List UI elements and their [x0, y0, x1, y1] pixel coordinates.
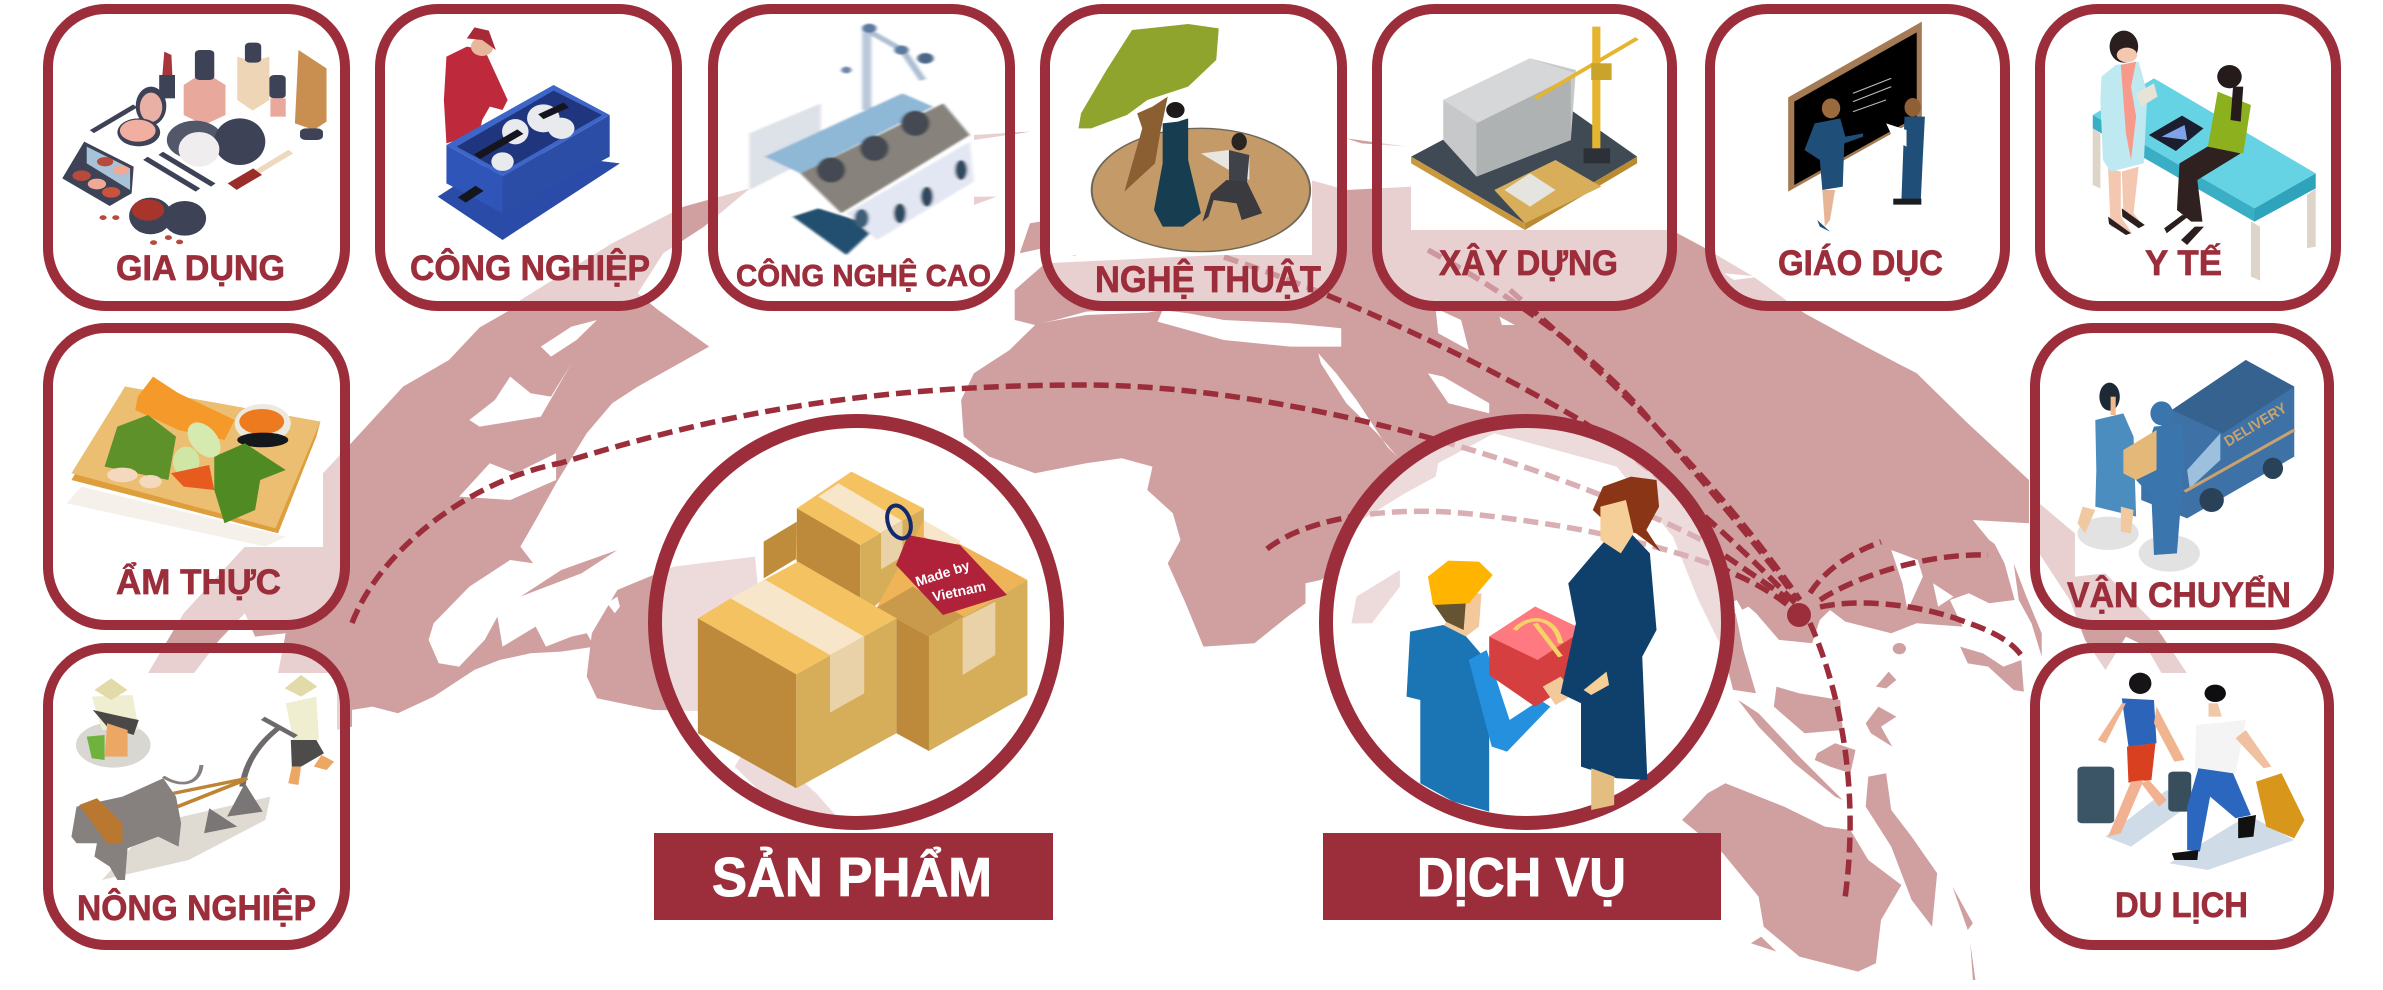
panel: Y tế [2040, 9, 2336, 306]
label: ẨM THỰC [116, 562, 281, 602]
icon: teachers at blackboard [1788, 22, 1925, 232]
label: GIÁO DỤC [1778, 243, 1943, 283]
icon: travellers with luggage [2077, 673, 2304, 870]
label: Y TẾ [2145, 243, 2222, 283]
panel: Xây dựng [1377, 9, 1672, 306]
icon: high-tech production line [749, 24, 974, 255]
icon: worker and gearbox [438, 27, 620, 240]
icon: doctor and patient [2093, 31, 2316, 281]
background world map [148, 132, 2187, 980]
panel: Công nghệ cao [713, 9, 1010, 306]
label: XÂY DỰNG [1439, 243, 1618, 283]
vietnam hub marker [1787, 603, 1811, 627]
icon: cosmetics [62, 43, 327, 245]
icon: delivery van and courier [2077, 360, 2294, 572]
panel: Giáo dục [1710, 9, 2005, 306]
panel: Nghệ thuật [1045, 9, 1342, 306]
panel: Gia dụng [48, 9, 345, 306]
icon: cardboard boxes [698, 472, 1027, 788]
icon: made by vietnam tag [883, 502, 1007, 615]
icon: made by vietnam tag: Vietnam [931, 578, 987, 605]
icon: building construction site [1411, 27, 1637, 230]
panel: Ẩm thực [48, 328, 345, 625]
banner: Dịch vụ: DỊCH VỤ [1417, 846, 1626, 908]
dashed route lines [352, 250, 2021, 898]
label: GIA DỤNG [116, 249, 285, 288]
panel: Sản phẩm circle [655, 421, 1057, 823]
banner: Dịch vụ [1323, 833, 1721, 920]
panel: Nông nghiệp [48, 648, 345, 945]
van lettering: DELIVERY [2221, 400, 2290, 450]
banner: Sản phẩm: SẢN PHẨM [712, 846, 992, 908]
label: NÔNG NGHIỆP [77, 888, 316, 928]
panel: Vận chuyển [2035, 328, 2329, 625]
label: CÔNG NGHỆ CAO [736, 257, 991, 293]
panel: Dịch vụ circle [1326, 421, 1728, 823]
icon: couple under a tree [1078, 24, 1310, 252]
label: NGHỆ THUẬT [1095, 258, 1321, 300]
label: VẬN CHUYỂN [2067, 575, 2291, 615]
label: CÔNG NGHIỆP [410, 248, 650, 288]
label: DU LỊCH [2115, 886, 2248, 925]
icon: made by vietnam tag: Made by [913, 557, 972, 590]
panel: Du lịch [2035, 648, 2329, 945]
icon: food platter [66, 377, 320, 547]
icon: farmers ploughing with buffalo [71, 675, 334, 880]
panel: Công nghiệp [380, 9, 677, 306]
icon: courier handing gift to customer [1407, 477, 1661, 812]
banner: Sản phẩm [654, 833, 1053, 920]
